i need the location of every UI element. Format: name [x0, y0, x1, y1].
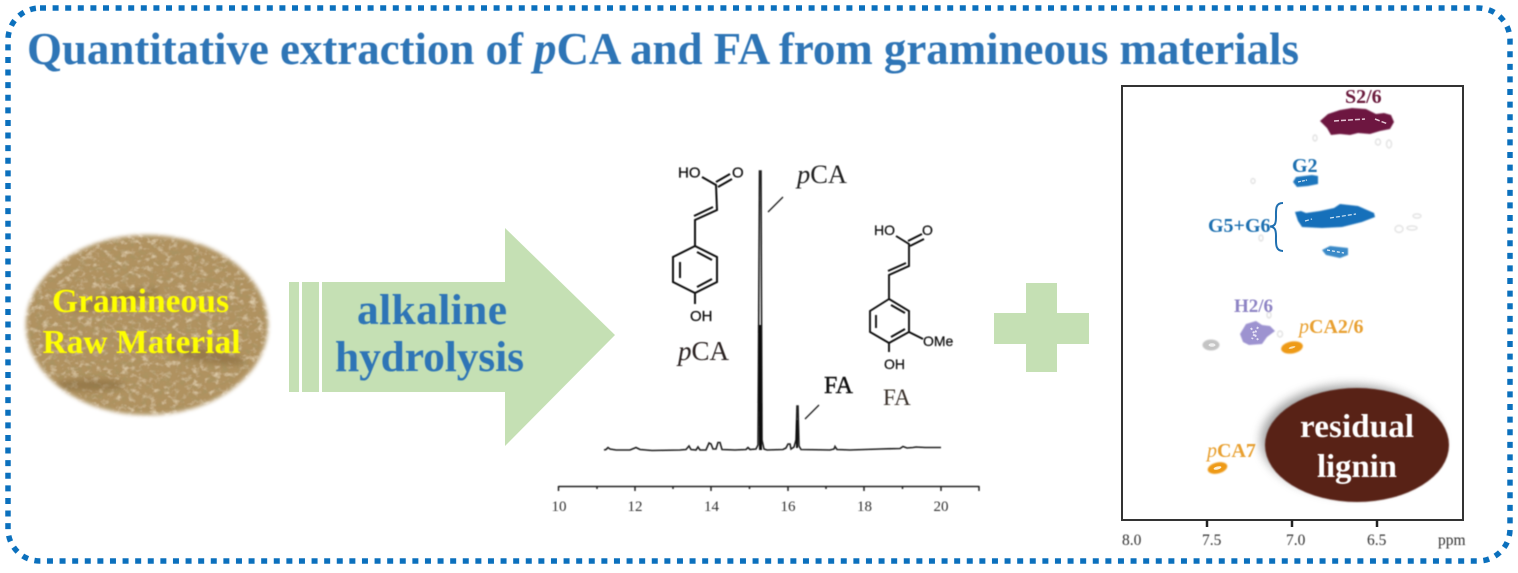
main peak thickening	[758, 325, 762, 450]
FA peak thickening	[796, 420, 798, 448]
arrow: alkaline hydrolysis	[289, 228, 615, 446]
x axis labels: 14	[704, 499, 720, 515]
axis labels: 7.0	[1286, 532, 1306, 549]
molecule: FA: OMe	[923, 333, 954, 349]
axis labels: 7.5	[1202, 532, 1222, 549]
axis labels: 8.0	[1122, 532, 1142, 549]
peak label pCA	[768, 159, 847, 212]
chromatogram	[552, 159, 979, 515]
molecule: pCA: O	[732, 164, 744, 182]
H2/6 signal	[1234, 296, 1275, 345]
plus sign	[994, 283, 1089, 372]
x axis labels: 10	[552, 499, 566, 515]
molecule: pCA: OH	[690, 308, 712, 325]
peak label pCA: pCA	[795, 159, 847, 189]
arrow label: alkaline	[357, 286, 507, 334]
baseline and peaks	[604, 171, 941, 450]
badge label: lignin	[1317, 449, 1397, 485]
axis labels: 6.5	[1367, 532, 1387, 549]
powder label: Gramineous	[52, 283, 229, 320]
badge label: residual	[1300, 409, 1414, 445]
small contour	[1322, 246, 1348, 258]
axis labels: ppm	[1438, 532, 1466, 549]
FA caption: FA	[883, 385, 911, 410]
S2/6 signal	[1320, 86, 1394, 135]
H2/6 signal: H2/6	[1234, 296, 1273, 317]
gray contour	[1202, 340, 1220, 350]
axis labels	[1122, 532, 1466, 549]
title: Quantitative extraction of pCA and FA from gramineous materials	[27, 24, 1299, 74]
molecule: FA: HO	[874, 222, 895, 238]
x axis labels: 20	[934, 499, 948, 515]
axis ticks	[1207, 520, 1377, 527]
powder label: Raw Material	[42, 324, 240, 361]
S2/6 signal: S2/6	[1345, 86, 1382, 108]
molecule: FA: OH	[884, 356, 905, 372]
G5+G6 signals: G5+G6	[1208, 215, 1271, 237]
powder label	[42, 283, 240, 361]
HSQC NMR panel	[1122, 86, 1466, 549]
x axis	[558, 486, 979, 491]
residual lignin badge	[1261, 385, 1449, 502]
x axis labels: 12	[628, 499, 642, 515]
molecule: pCA: HO	[678, 164, 700, 182]
molecule: pCA	[673, 164, 744, 366]
pCA caption: pCA	[676, 336, 730, 366]
panel frame	[1122, 86, 1463, 520]
large contour	[1295, 204, 1375, 228]
gramineous raw material powder	[20, 228, 276, 424]
G5+G6 signals	[1208, 203, 1375, 258]
pCA7 signal	[1205, 440, 1256, 476]
badge label	[1300, 409, 1414, 485]
arrow label: hydrolysis	[335, 333, 524, 381]
molecule: FA: O	[922, 222, 933, 238]
peak label FA: FA	[824, 373, 854, 399]
x axis labels: 18	[857, 499, 872, 515]
G2 signal: G2	[1292, 155, 1318, 177]
pCA7 signal: pCA7	[1205, 440, 1256, 462]
x axis labels: 16	[780, 499, 796, 515]
faint gray contours	[1251, 135, 1421, 337]
x axis labels	[552, 499, 948, 515]
pCA2/6 signal: pCA2/6	[1297, 316, 1363, 338]
pCA2/6 signal	[1280, 316, 1363, 355]
arrow label	[335, 286, 524, 381]
molecule: FA	[870, 222, 954, 410]
brace	[1270, 203, 1283, 251]
peak label FA	[805, 373, 854, 419]
G2 signal	[1292, 155, 1318, 187]
